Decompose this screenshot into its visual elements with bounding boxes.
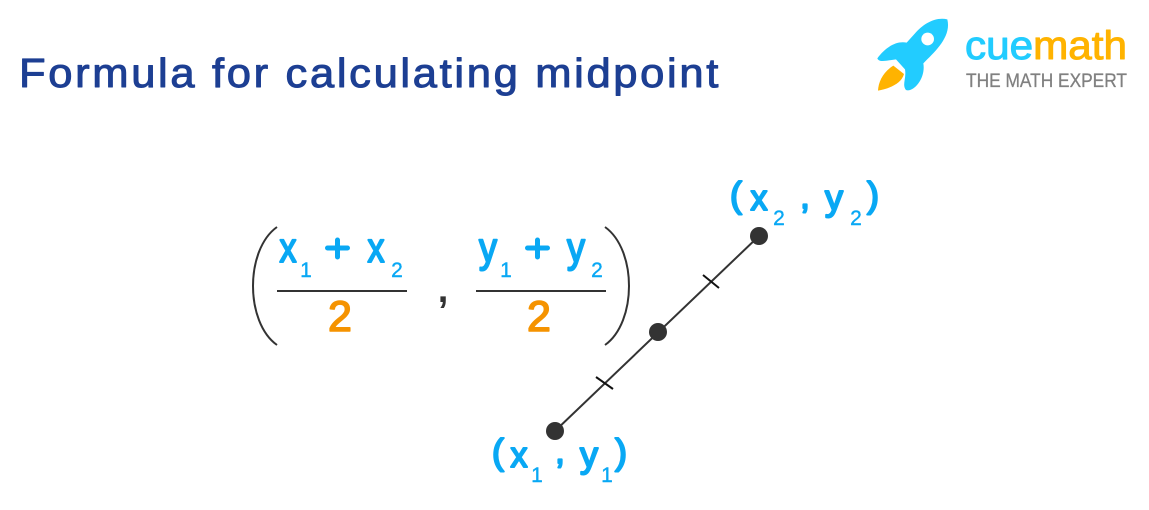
label: (x1, y1): (	[492, 431, 504, 472]
numerator: y1 + y2: 1	[500, 259, 512, 282]
numerator: x1 + x2: x	[368, 224, 384, 271]
label: (x2, y2): (	[730, 174, 742, 215]
point: x2 y2	[750, 227, 768, 245]
tick mark upper	[703, 275, 719, 288]
right parenthesis	[605, 227, 629, 345]
numerator: x1 + x2: 2	[391, 259, 403, 282]
label: (x2, y2): y	[825, 177, 843, 218]
fraction bar	[277, 290, 407, 292]
wordmark: cuemath	[965, 24, 1127, 68]
line segment with midpoint	[546, 227, 768, 440]
label: (x1, y1): )	[615, 431, 627, 472]
comma: ,	[438, 269, 448, 311]
label: (x2, y2): ,	[800, 178, 810, 216]
fraction: y coordinates	[476, 224, 606, 341]
numerator: y1 + y2: y	[567, 224, 585, 271]
numerator: x1 + x2: 1	[300, 259, 312, 282]
label: (x1, y1): ,	[555, 433, 565, 471]
tagline: THE MATH EXPERT	[966, 70, 1127, 92]
label: (x2, y2): 2	[850, 207, 862, 230]
midpoint formula	[253, 224, 629, 345]
label: (x1, y1): x	[510, 434, 528, 475]
label: (x1, y1): 1	[531, 464, 543, 487]
denominator: 2	[328, 293, 352, 341]
denominator: 2	[527, 293, 551, 341]
fraction: x coordinates	[277, 224, 407, 341]
label: (x1, y1): y	[580, 434, 598, 475]
label: (x2, y2): )	[867, 174, 879, 215]
logo: cuemath	[877, 19, 1127, 92]
icon: rocket	[877, 19, 948, 91]
tick mark lower	[596, 377, 613, 389]
label: (x2, y2)	[730, 174, 879, 230]
label: (x2, y2): 2	[773, 207, 785, 230]
numerator: x1 + x2	[280, 224, 403, 282]
numerator: x1 + x2: x	[280, 224, 296, 271]
numerator: y1 + y2	[479, 224, 603, 282]
label: (x1, y1)	[492, 431, 627, 487]
left parenthesis	[253, 227, 277, 345]
label: (x2, y2): x	[750, 177, 768, 218]
point: midpoint	[649, 323, 667, 341]
title: Formula for calculating midpoint	[19, 50, 721, 96]
fraction bar	[476, 290, 606, 292]
numerator: y1 + y2: y	[479, 224, 497, 271]
label: (x1, y1): 1	[601, 464, 613, 487]
numerator: y1 + y2: 2	[591, 259, 603, 282]
point: x1 y1	[546, 422, 564, 440]
